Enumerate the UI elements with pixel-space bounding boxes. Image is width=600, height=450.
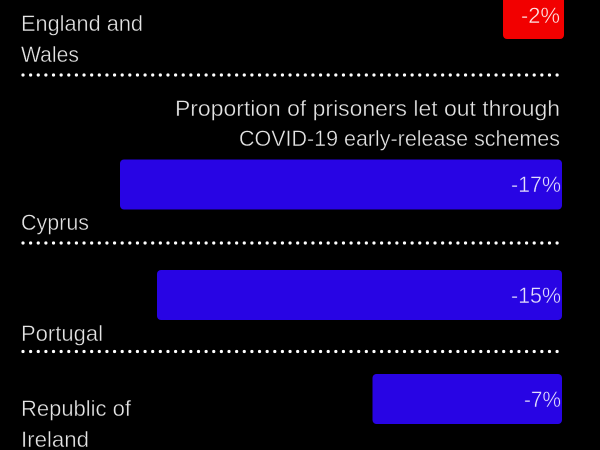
value: -7%: -7% — [524, 387, 561, 412]
bar: Portugal -15% — [157, 270, 562, 320]
row: England and Wales — [21, 0, 564, 67]
label: England and Wales: England and — [21, 11, 143, 36]
label: England and Wales: Wales — [21, 42, 79, 67]
row: Portugal — [21, 270, 562, 346]
row: Cyprus — [21, 160, 562, 235]
label: Republic of Ireland: Republic of — [21, 396, 132, 421]
label: Portugal: Portugal — [21, 321, 103, 346]
label: Cyprus: Cyprus — [21, 210, 89, 235]
row: Republic of Ireland — [21, 374, 562, 450]
heading: proportion of prisoners — [175, 96, 560, 151]
label: Republic of Ireland — [21, 396, 132, 450]
value: -15%: -15% — [511, 283, 561, 308]
heading: proportion of prisoners: COVID-19 early-release schemes — [239, 126, 560, 151]
label: England and Wales — [21, 11, 143, 67]
bar: Cyprus -17% — [120, 160, 562, 210]
value: -2%: -2% — [521, 3, 560, 28]
value: -17%: -17% — [511, 172, 561, 197]
bar: England and Wales -2% — [503, 0, 564, 39]
bar: Republic of Ireland -7% — [372, 374, 562, 424]
heading: proportion of prisoners: Proportion of prisoners let out through — [175, 96, 560, 121]
